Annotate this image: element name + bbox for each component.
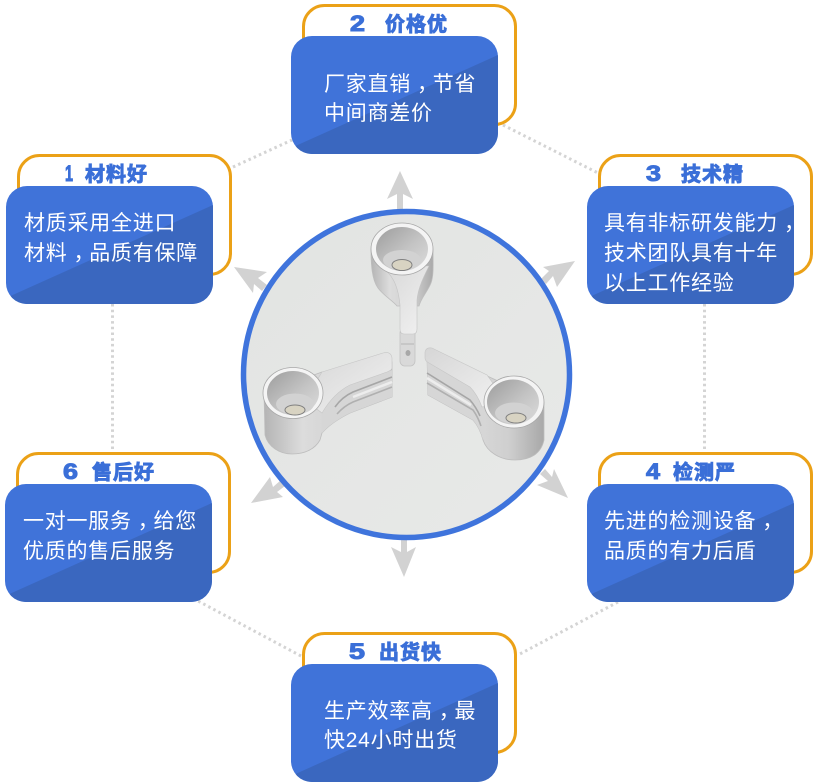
- text: card 1 body: 材质采用全进口: [24, 212, 176, 235]
- heading: 2 价格优: 2: [350, 11, 365, 36]
- arrow: upper left: [234, 267, 267, 293]
- text: card 4 body: [604, 510, 784, 563]
- text: card 1 body: [24, 212, 198, 265]
- panel: 5 出货快: [291, 634, 516, 782]
- product: left bracket: [263, 353, 392, 454]
- central product photo: [244, 212, 570, 538]
- heading: 2 价格优: [350, 11, 448, 36]
- text: card 6 body: [23, 510, 197, 563]
- text: card 2 body: 中间商差价: [324, 102, 433, 125]
- connector: card 2 to card 3: [503, 125, 598, 173]
- connector: card 6 to card 1: [111, 304, 114, 453]
- heading: 6 售后好: 6: [63, 459, 78, 484]
- panel: 3 技术精: [587, 156, 812, 304]
- arrow: lower left: [251, 477, 285, 503]
- panel: 4 检测严: [587, 454, 812, 602]
- product: top bracket: [371, 223, 433, 366]
- heading: 5 出货快: [349, 639, 442, 664]
- heading: 4 检测严: 检测严: [673, 460, 736, 484]
- heading: 2 价格优: 价格优: [385, 13, 448, 36]
- arrow: lower right: [537, 469, 568, 498]
- heading: 4 检测严: 4: [646, 459, 661, 484]
- text: card 3 body: [604, 212, 806, 295]
- heading: 1 材料好: 1: [65, 161, 73, 186]
- heading: 3 技术精: 技术精: [681, 163, 744, 186]
- connector: card 5 to card 6: [198, 601, 301, 656]
- heading: 1 材料好: 材料好: [85, 163, 148, 186]
- text: card 2 body: 厂家直销 ，节省: [324, 73, 476, 96]
- arrow: upper right: [541, 261, 575, 287]
- text: card 3 body: 技术团队具有十年: [604, 242, 778, 265]
- heading: 3 技术精: [646, 161, 744, 186]
- connector: card 1 to card 2: [233, 140, 292, 167]
- text: card 4 body: 品质的有力后盾: [604, 540, 756, 563]
- text: card 6 body: 优质的售后服务: [23, 540, 175, 563]
- text: card 5 body: 生产效率高 ，最: [324, 700, 476, 723]
- text: card 2 body: [324, 73, 476, 125]
- heading: 6 售后好: [63, 459, 155, 484]
- product: right bracket: [425, 348, 544, 460]
- heading: 3 技术精: 3: [646, 161, 661, 186]
- heading: 4 检测严: [646, 459, 736, 484]
- text: card 3 body: 以上工作经验: [604, 272, 734, 295]
- connector: card 4 to card 5: [518, 602, 618, 655]
- text: card 3 body: 具有非标研发能力 ，: [604, 212, 806, 235]
- text: card 1 body: 材料 ，品质有保障: [24, 242, 198, 265]
- text: card 4 body: 先进的检测设备 ，: [604, 510, 784, 533]
- text: card 6 body: 一对一服务 ，给您: [23, 510, 197, 533]
- text: card 5 body: 快24小时出货: [324, 729, 458, 752]
- panel: 1 材料好: [6, 156, 230, 304]
- heading: 5 出货快: 出货快: [379, 640, 442, 664]
- heading: 5 出货快: 5: [349, 639, 365, 664]
- text: card 5 body: [324, 700, 476, 752]
- panel: 2 价格优: [291, 6, 516, 154]
- heading: 6 售后好: 售后好: [92, 461, 155, 484]
- arrow: down: [391, 539, 416, 577]
- connector: card 3 to card 4: [703, 304, 706, 453]
- heading: 1 材料好: [65, 161, 148, 186]
- arrow: up: [387, 171, 413, 209]
- panel: 6 售后好: [5, 454, 230, 602]
